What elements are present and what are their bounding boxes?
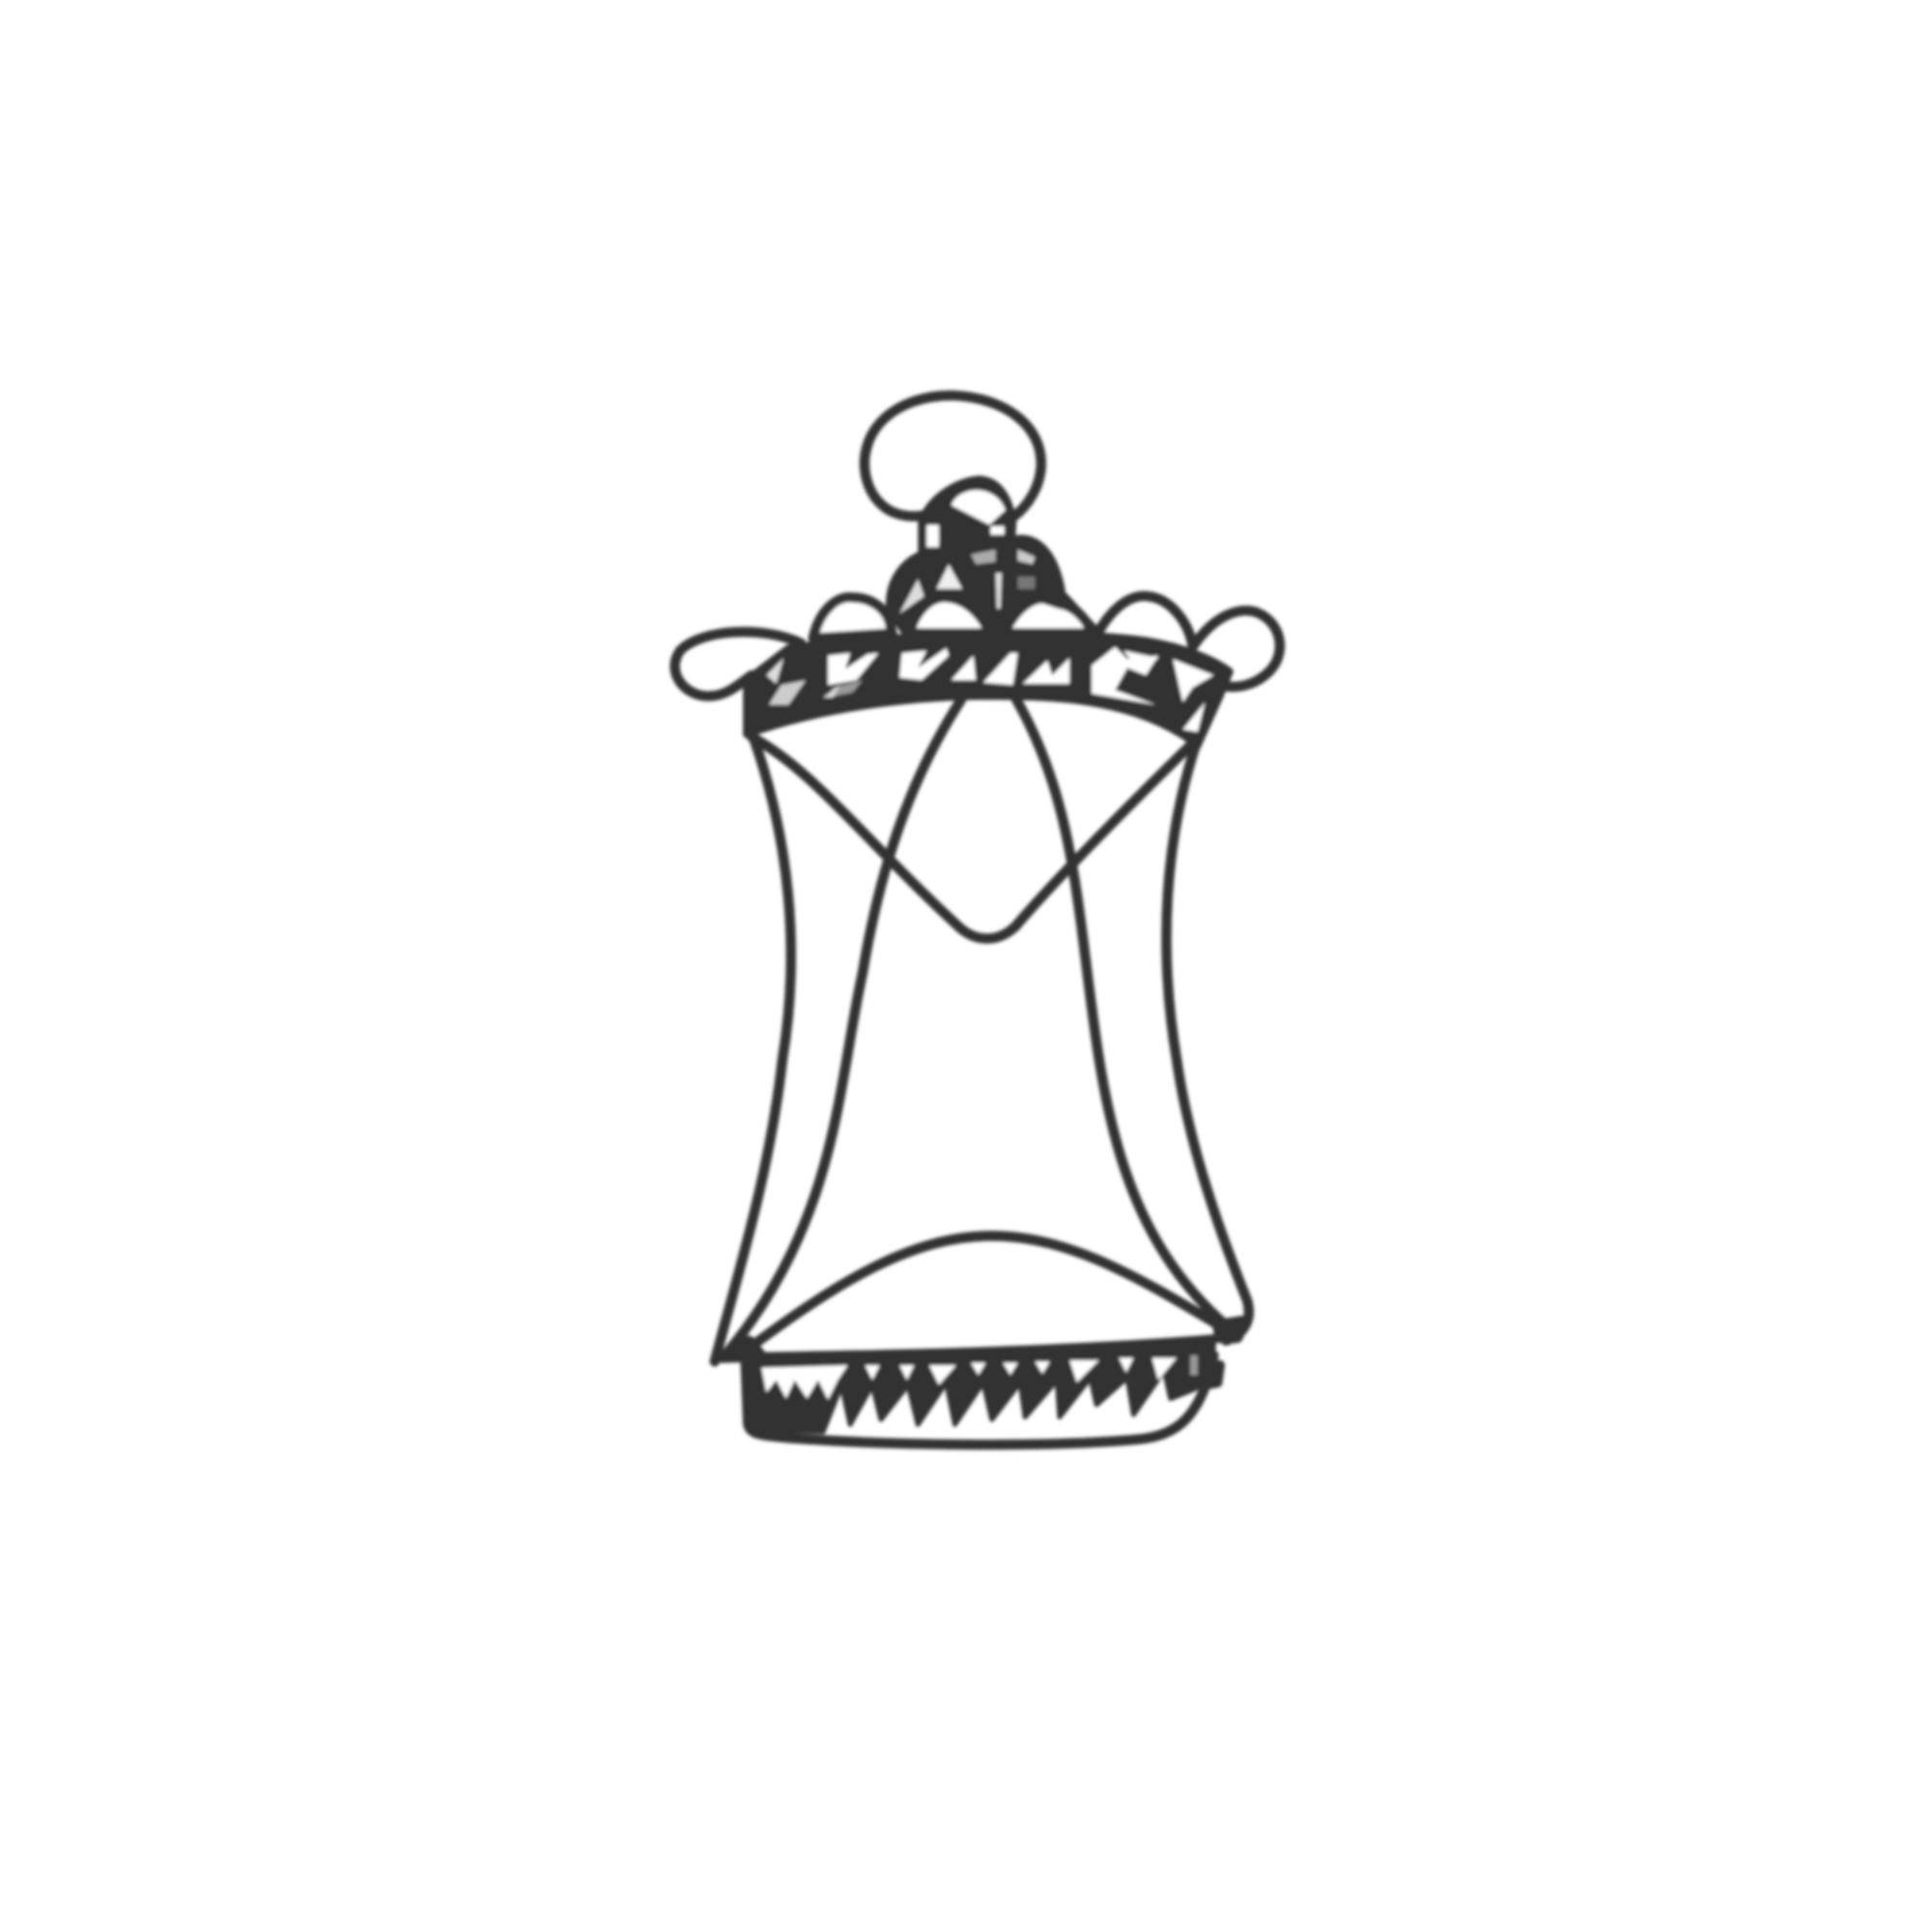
side loops [675,611,1280,696]
upper patterned band [747,634,1230,746]
domes [813,597,892,639]
lantern cap [813,479,1193,647]
hanging ring [865,395,1041,518]
patterned base [721,1339,1220,1444]
lantern glass frame [715,699,1249,1361]
